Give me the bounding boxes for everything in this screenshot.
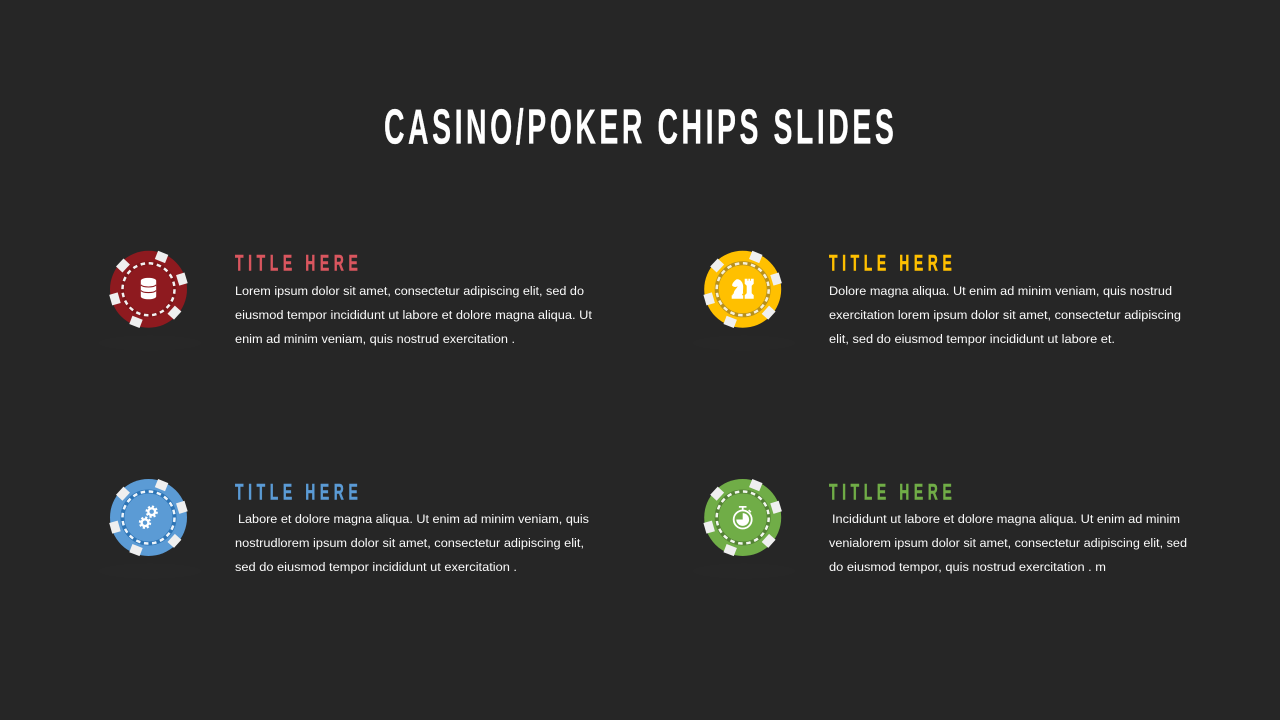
heading: TITLE HERE — [829, 250, 952, 275]
chip shadow — [692, 335, 796, 351]
text block: Labore et dolore magna aliqua. Ut enim ad minim veniam, quis — [238, 512, 589, 526]
panel: green item — [692, 479, 1187, 579]
text block — [235, 512, 589, 574]
icon: blue poker chip with gears — [109, 479, 188, 556]
text block: Incididunt ut labore et dolore magna aliqua. Ut enim ad minim — [832, 512, 1180, 526]
text block: nostrudlorem ipsum dolor sit amet, consectetur adipiscing elit, — [235, 536, 584, 550]
chip shadow — [98, 563, 202, 579]
text block — [235, 284, 593, 346]
text block: eiusmod tempor incididunt ut labore et dolore magna aliqua. Ut — [235, 308, 593, 322]
heading: TITLE HERE — [829, 479, 952, 504]
text block: enim ad minim veniam, quis nostrud exercitation . — [235, 332, 515, 346]
panel: yellow item — [692, 250, 1181, 351]
text block — [829, 284, 1181, 346]
icon: yellow poker chip with chess pieces — [703, 251, 782, 328]
heading: TITLE HERE — [235, 250, 358, 275]
title: CASINO/POKER CHIPS SLIDES — [384, 101, 894, 155]
text block: exercitation lorem ipsum dolor sit amet, consectetur adipiscing — [829, 308, 1181, 322]
text block: venialorem ipsum dolor sit amet, consectetur adipiscing elit, sed — [829, 536, 1187, 550]
panel: red item — [98, 250, 593, 351]
icon: red poker chip with database — [109, 251, 188, 328]
chip shadow — [98, 335, 202, 351]
chip shadow — [692, 563, 796, 579]
text block: Dolore magna aliqua. Ut enim ad minim veniam, quis nostrud — [829, 284, 1172, 298]
text block: elit, sed do eiusmod tempor incididunt ut labore et. — [829, 332, 1115, 346]
text block: do eiusmod tempor, quis nostrud exercitation . m — [829, 560, 1106, 574]
text block — [829, 512, 1187, 574]
text block: sed do eiusmod tempor incididunt ut exercitation . — [235, 560, 517, 574]
heading: TITLE HERE — [235, 479, 358, 504]
text block: Lorem ipsum dolor sit amet, consectetur adipiscing elit, sed do — [235, 284, 584, 298]
panel: blue item — [98, 479, 589, 579]
icon: green poker chip with stopwatch — [703, 479, 782, 556]
